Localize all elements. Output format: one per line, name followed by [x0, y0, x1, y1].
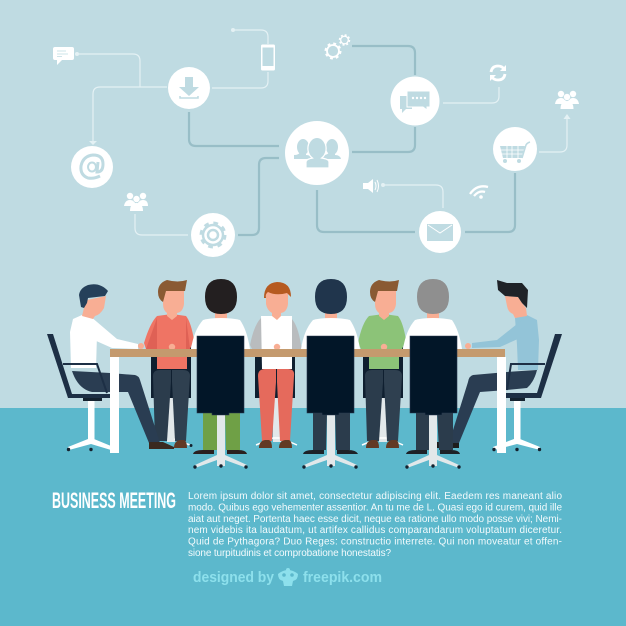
icon: refresh — [490, 65, 506, 81]
credit — [193, 568, 382, 586]
hand — [381, 344, 387, 350]
floor background — [0, 408, 626, 626]
chair base — [492, 398, 541, 451]
trousers — [313, 405, 350, 450]
neck and face — [163, 291, 184, 320]
neck and face — [266, 291, 288, 320]
shoes — [174, 440, 187, 448]
chair base — [256, 438, 297, 445]
left leg — [365, 370, 383, 441]
person: man in green shirt — [358, 280, 406, 448]
chair back — [363, 338, 403, 398]
left leg — [153, 370, 171, 441]
person from behind: navy hair — [301, 279, 360, 469]
body text: modo. Quibus ego vehementer assentior. An tu me de L. Quasi ego id curem, quid ille — [188, 502, 562, 514]
hand — [169, 344, 175, 350]
chair seat block — [83, 397, 102, 401]
node: chat — [390, 76, 440, 126]
shoes — [259, 440, 272, 448]
node: mail — [419, 211, 461, 253]
chair base — [67, 398, 111, 451]
shoes — [193, 450, 247, 454]
head — [315, 279, 347, 314]
legs — [449, 370, 537, 443]
chair base — [195, 413, 247, 468]
icon: people group right — [555, 91, 579, 109]
arm — [90, 316, 138, 349]
shirt — [358, 314, 406, 369]
credit: freepik.com — [303, 570, 382, 586]
shirt — [403, 318, 462, 349]
icon: people group left — [124, 193, 148, 211]
body text: Quid de Pythagora? Duo Reges: constructio interrete. Qui non moveatur et offen- — [188, 536, 562, 548]
neck — [215, 312, 227, 320]
shirt — [301, 318, 360, 349]
node: download — [168, 67, 210, 109]
left leg — [258, 369, 276, 441]
person: profile man right with chair — [437, 280, 562, 451]
connector lines: light — [77, 30, 567, 235]
neck and face — [505, 296, 527, 318]
neck — [325, 312, 337, 320]
title: BUSINESS MEETING — [52, 488, 176, 513]
sleeves — [250, 318, 303, 349]
torso — [515, 315, 539, 370]
hair — [79, 284, 108, 308]
person from behind: grey hair — [403, 279, 462, 469]
body text: Lorem ipsum dolor sit amet, consectetur adipiscing elit. Eaedem res maneant alio — [188, 491, 562, 502]
icon: smartphone — [261, 44, 275, 70]
chair frame — [507, 364, 545, 390]
shoe — [437, 442, 459, 448]
body text: nem videbis ita laudatum, ut artifex callidus comparandarum voluptatum diceretur. — [188, 525, 562, 536]
person from behind: dark hair, green trousers — [191, 279, 250, 469]
icon: settings gears — [326, 35, 350, 58]
chair base — [407, 413, 459, 468]
trousers — [416, 405, 453, 450]
hand — [274, 344, 280, 350]
icon: freepik mascot — [278, 568, 298, 586]
node: gear — [191, 213, 235, 257]
hub: people — [285, 121, 349, 185]
table legs — [110, 357, 119, 453]
chair stem — [379, 398, 387, 442]
right leg — [277, 369, 294, 441]
trousers — [203, 405, 240, 450]
chair back — [307, 336, 354, 415]
shoes — [149, 442, 174, 449]
wall background — [0, 0, 626, 408]
body text: sione turpitudinis et comprobatione honestatis? — [188, 548, 391, 559]
person: profile man left with chair — [47, 284, 174, 451]
icon: megaphone — [363, 179, 378, 193]
icon: wifi — [470, 186, 488, 199]
credit: designed by — [193, 570, 274, 586]
network diagram — [53, 28, 579, 257]
node: cart — [493, 127, 537, 171]
table top — [110, 349, 505, 357]
chair back — [255, 338, 295, 398]
shirt — [144, 314, 194, 369]
table — [110, 349, 506, 453]
chair frame — [63, 364, 107, 393]
shirt arm shading — [146, 318, 190, 349]
hair — [370, 280, 399, 302]
hair — [497, 280, 528, 308]
connector lines: dark — [189, 46, 515, 235]
body text: aiat aut neget. Portenta haec esse dicit, neque ea ratione ullo modo posse vivi; Nemi- — [188, 514, 562, 525]
vest — [261, 316, 292, 369]
shirt — [191, 318, 250, 349]
connector end dots and arrows — [75, 28, 570, 187]
arm — [472, 320, 522, 348]
icon: message bubble — [53, 47, 74, 65]
shoes — [366, 440, 379, 448]
hair — [158, 280, 187, 302]
node: at sign — [71, 146, 113, 188]
right leg — [172, 370, 190, 441]
head — [205, 279, 237, 314]
chair back — [410, 336, 457, 415]
chair base — [362, 438, 403, 445]
chair back and seat — [47, 334, 110, 398]
torso — [70, 315, 97, 368]
hand — [465, 343, 471, 349]
person: man in red shirt — [144, 280, 194, 448]
shoes — [406, 450, 460, 454]
body text — [188, 491, 562, 559]
head — [417, 279, 449, 314]
person: woman in white vest — [250, 282, 303, 448]
shoes — [303, 450, 358, 454]
chair back — [151, 338, 191, 398]
legs — [72, 371, 160, 443]
chair seat block — [510, 397, 525, 401]
chair stem — [167, 398, 175, 442]
neck and face — [375, 291, 396, 320]
chair stem — [273, 398, 281, 442]
right leg — [384, 370, 402, 441]
chair base — [174, 439, 190, 445]
neck — [427, 312, 439, 320]
hair — [264, 282, 291, 298]
chair base — [304, 413, 357, 468]
neck and face — [82, 296, 106, 319]
chair back — [197, 336, 244, 415]
chair back and seat — [506, 334, 562, 398]
hand — [138, 343, 144, 349]
